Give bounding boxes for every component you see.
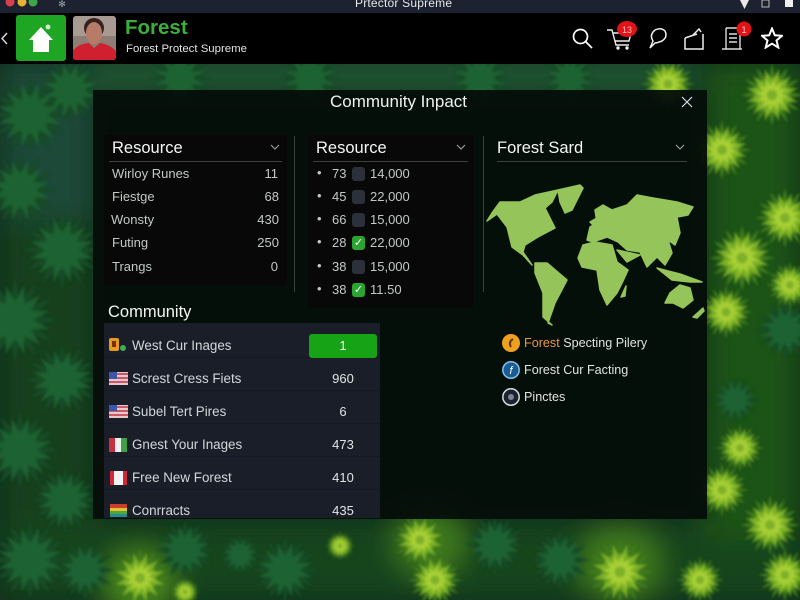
icon: cart with badge: 13 bbox=[622, 25, 632, 35]
brand subtitle: Forest Protect Supreme bbox=[126, 43, 247, 55]
panel heading: Resource bbox=[316, 139, 387, 157]
row: 73 bbox=[317, 165, 410, 181]
row: Futing bbox=[112, 235, 279, 250]
icon: search bbox=[572, 28, 593, 49]
row: contracts: 435 bbox=[332, 503, 354, 518]
row: subel tert pires bbox=[104, 390, 380, 424]
back chevron bbox=[1, 32, 8, 44]
row: Wonsty: Wonsty bbox=[111, 212, 154, 227]
legend item: pinctes: Pinctes bbox=[524, 390, 565, 404]
modal title: Community Inpact bbox=[330, 92, 467, 111]
row: 28 checked: 22,000 bbox=[370, 235, 410, 250]
row: 38 checked bbox=[317, 281, 402, 297]
row: west cur inages: West Cur Inages bbox=[132, 338, 231, 353]
row: 73: 14,000 bbox=[370, 166, 410, 181]
world map bbox=[486, 184, 705, 326]
row: 73: 73 bbox=[332, 166, 346, 181]
row: 28 checked: 28 bbox=[332, 235, 346, 250]
row: 38: • bbox=[317, 258, 322, 273]
row: 45 bbox=[317, 188, 410, 204]
row: Trangs: Trangs bbox=[112, 259, 152, 274]
row: 45: • bbox=[317, 188, 322, 203]
row: 28 checked: • bbox=[317, 234, 322, 249]
row: Wirloy Runes: Wirloy Runes bbox=[112, 166, 189, 181]
panel: resource list bbox=[104, 135, 287, 285]
icon: badge bbox=[109, 338, 126, 351]
value button bbox=[309, 334, 377, 358]
row: screst cress fiets bbox=[104, 357, 380, 391]
legend item: forest cur facting: f bbox=[509, 365, 513, 377]
row: 73: • bbox=[317, 165, 322, 180]
heading: forest sard: Forest Sard bbox=[497, 139, 583, 157]
icon: document with badge: 1 bbox=[741, 25, 747, 35]
dropdown chevron bbox=[456, 144, 466, 150]
row: screst cress fiets: 960 bbox=[332, 371, 354, 386]
row: 38: 38 bbox=[332, 259, 346, 274]
dropdown chevron bbox=[676, 144, 684, 150]
icon: chat bubble bbox=[649, 28, 667, 48]
app header bar bbox=[0, 13, 800, 64]
icon: flag bbox=[110, 504, 127, 517]
row: Wonsty bbox=[111, 212, 279, 227]
icon: flag bbox=[109, 405, 128, 418]
row: subel tert pires: Subel Tert Pires bbox=[132, 404, 226, 419]
brand name: Forest bbox=[125, 16, 188, 39]
row: contracts: Conrracts bbox=[132, 503, 190, 518]
row: Futing: Futing bbox=[112, 235, 148, 250]
row: contracts bbox=[110, 503, 354, 518]
row: west cur inages bbox=[104, 324, 380, 358]
row: 38 checked: 11.50 bbox=[370, 282, 402, 297]
icon: document with badge bbox=[722, 22, 752, 50]
row: 45: 45 bbox=[332, 189, 346, 204]
row: 66: 15,000 bbox=[370, 212, 410, 227]
legend item: pinctes bbox=[502, 388, 565, 406]
legend item: forest cur facting: Forest Cur Facting bbox=[524, 363, 628, 377]
row: gnest your inages bbox=[104, 423, 380, 457]
row: free new forest: 410 bbox=[332, 470, 354, 485]
row: Fiestge: 68 bbox=[265, 189, 279, 204]
dropdown chevron bbox=[270, 144, 280, 150]
row: subel tert pires: 6 bbox=[339, 404, 347, 419]
icon: star bbox=[761, 27, 783, 49]
panel: resource checklist bbox=[308, 135, 473, 308]
window control dots: ✻ bbox=[58, 0, 66, 10]
row: 28 checked: ✓ bbox=[354, 237, 363, 249]
row: 45: 22,000 bbox=[370, 189, 410, 204]
row: Wonsty: 430 bbox=[257, 212, 279, 227]
home button bbox=[16, 15, 66, 61]
legend item: forest cur facting bbox=[502, 361, 628, 379]
row: gnest your inages: 473 bbox=[332, 437, 354, 452]
row: 66 bbox=[317, 211, 410, 227]
row: free new forest bbox=[104, 456, 380, 490]
row: Trangs: 0 bbox=[271, 259, 278, 274]
icon: flag bbox=[110, 471, 127, 485]
window control dots bbox=[6, 0, 66, 10]
icon: flag bbox=[109, 438, 127, 452]
icon: share box bbox=[684, 28, 704, 50]
row: Fiestge bbox=[112, 189, 279, 204]
icon: flag bbox=[109, 372, 128, 385]
row: 66: • bbox=[317, 211, 322, 226]
row: 38 bbox=[317, 258, 410, 274]
status icons bbox=[740, 0, 793, 9]
legend bbox=[502, 334, 648, 406]
row: 38 checked: ✓ bbox=[354, 284, 363, 296]
row: Trangs bbox=[112, 259, 278, 274]
row: free new forest: Free New Forest bbox=[132, 470, 232, 485]
profile photo bbox=[73, 16, 116, 60]
row: Fiestge: Fiestge bbox=[112, 189, 155, 204]
row: Wirloy Runes bbox=[112, 166, 278, 181]
legend item: forest specting pilery bbox=[502, 334, 648, 352]
community table bbox=[104, 323, 380, 518]
value button: 1 bbox=[339, 338, 347, 353]
legend item: forest specting pilery: Forest Specting Pilery bbox=[524, 336, 647, 350]
row: 38 checked: 38 bbox=[332, 282, 346, 297]
row: 66: 66 bbox=[332, 212, 346, 227]
row: 38 checked: • bbox=[317, 281, 322, 296]
row: screst cress fiets: Screst Cress Fiets bbox=[132, 371, 241, 386]
row: 38: 15,000 bbox=[370, 259, 410, 274]
top system bar bbox=[0, 0, 800, 13]
row: Futing: 250 bbox=[257, 235, 279, 250]
panel heading: Resource bbox=[112, 139, 183, 157]
close icon bbox=[682, 96, 692, 108]
row: gnest your inages: Gnest Your Inages bbox=[132, 437, 242, 452]
heading: community: Community bbox=[108, 303, 191, 321]
modal: community impact bbox=[93, 90, 707, 519]
row: 28 checked bbox=[317, 234, 410, 250]
row: Wirloy Runes: 11 bbox=[264, 166, 278, 181]
icon: cart with badge bbox=[607, 21, 637, 50]
